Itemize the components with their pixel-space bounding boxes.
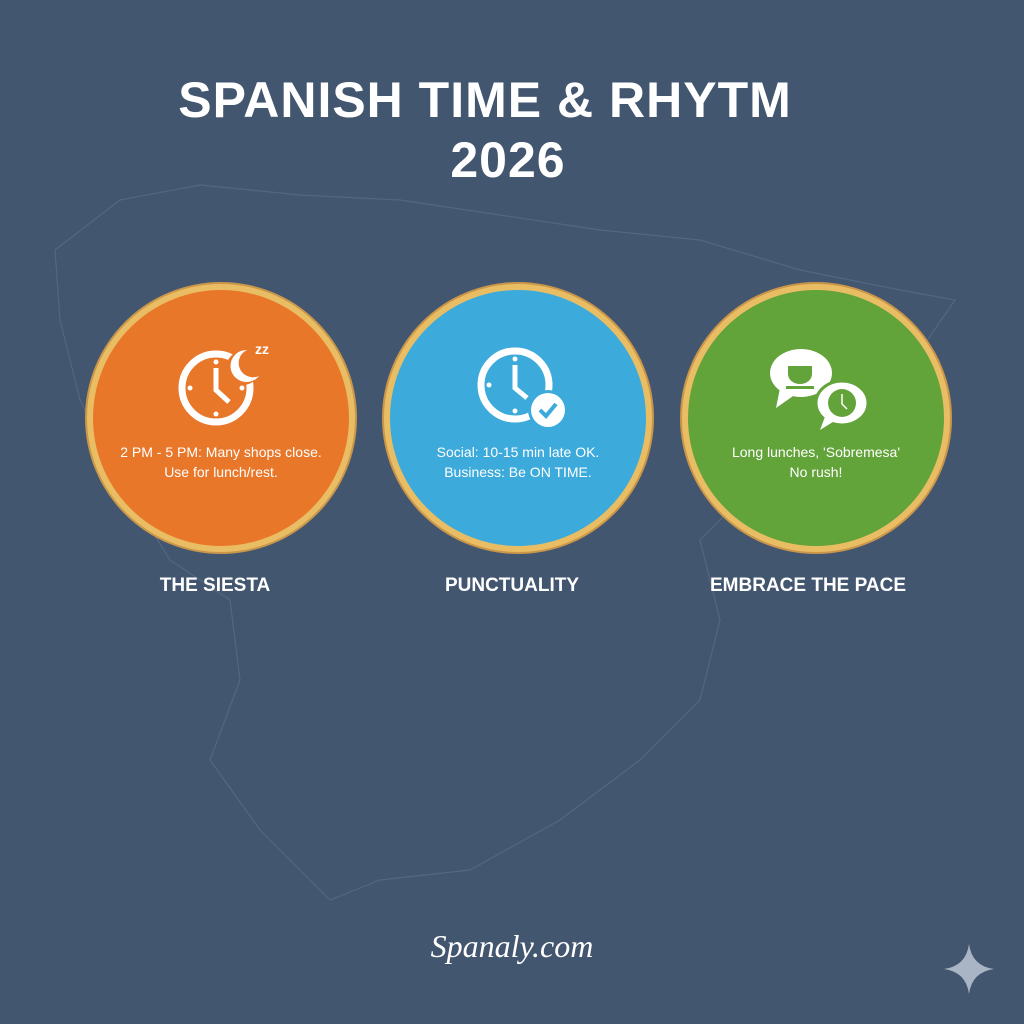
text: pace	[732, 444, 900, 480]
icon: clock with check	[478, 348, 565, 427]
text: siesta	[120, 444, 322, 480]
text: siesta: Use for lunch/rest.	[164, 464, 278, 480]
text: pace: Long lunches, 'Sobremesa'	[732, 444, 900, 460]
title: 2026	[450, 132, 566, 188]
label: pace: EMBRACE THE PACE	[710, 575, 906, 596]
text: pace: No rush!	[790, 464, 842, 480]
label: siesta: THE SIESTA	[160, 575, 270, 596]
text: punctuality: Business: Be ON TIME.	[444, 464, 592, 480]
text: siesta: 2 PM - 5 PM: Many shops close.	[120, 444, 322, 460]
title	[178, 72, 792, 188]
text: punctuality: Social: 10-15 min late OK.	[437, 444, 599, 460]
label: punctuality: PUNCTUALITY	[445, 575, 579, 596]
title: SPANISH TIME & RHYTM	[178, 72, 792, 128]
text: punctuality	[437, 444, 599, 480]
icon: chat bubbles	[770, 349, 866, 430]
icon: clock with moon: zz	[255, 341, 269, 357]
icon: sparkle	[944, 944, 994, 994]
panel: pace	[682, 284, 950, 552]
panel: siesta	[87, 284, 355, 552]
footer logo: Spanaly.com	[431, 928, 593, 964]
panel: punctuality	[384, 284, 652, 552]
icon: clock with moon	[178, 341, 269, 426]
